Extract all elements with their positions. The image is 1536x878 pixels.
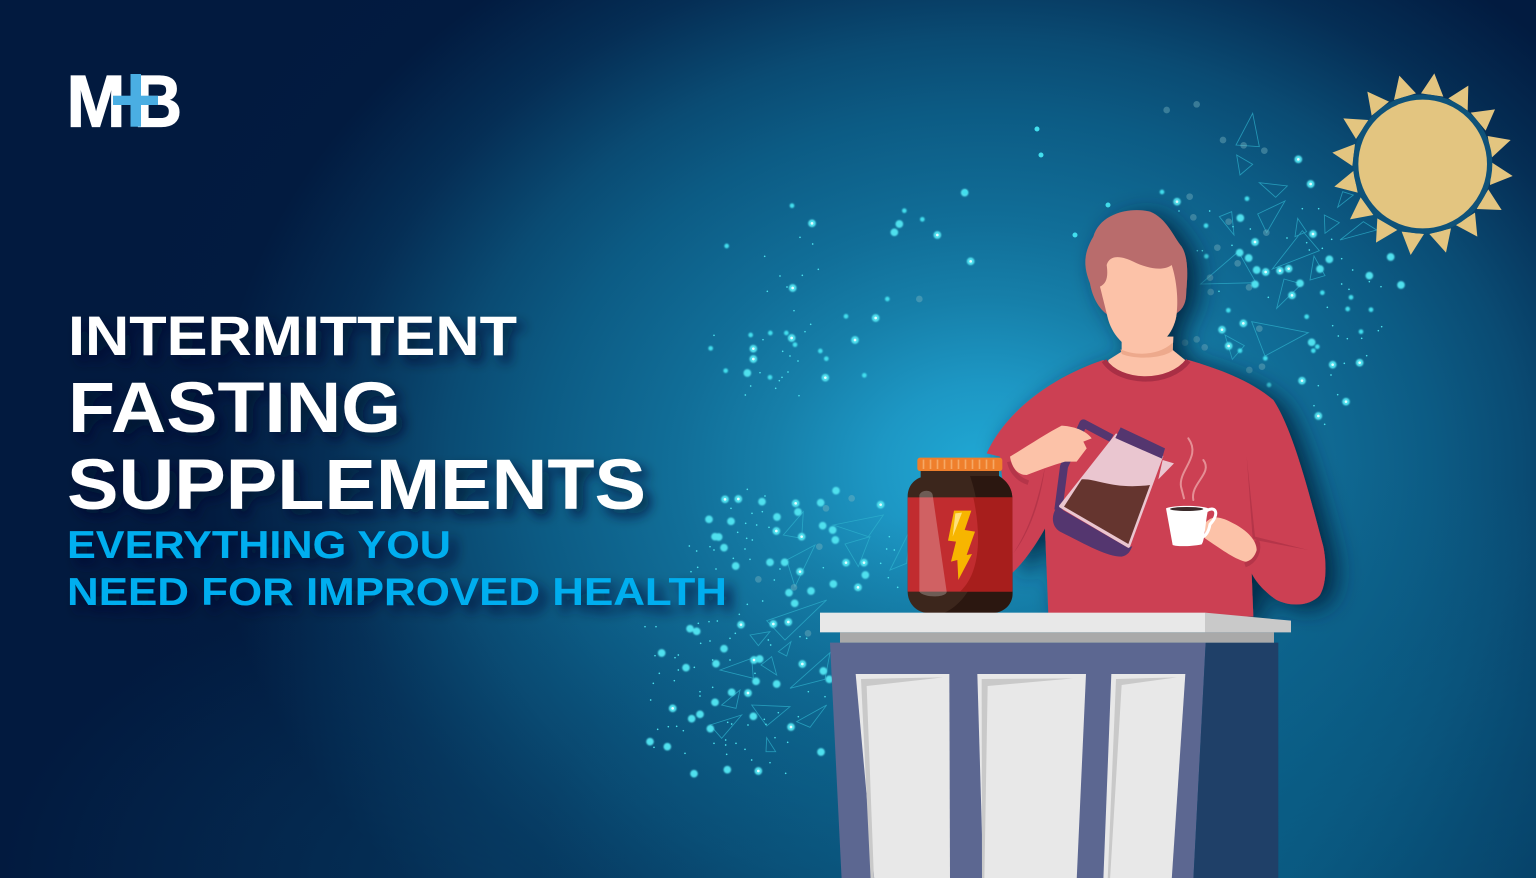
- panel left: [856, 674, 950, 878]
- counter side: [1193, 643, 1278, 878]
- panel right: [1103, 674, 1185, 878]
- jar cap: [917, 458, 1002, 471]
- coffee cup: [1166, 506, 1216, 546]
- subheading line 2: NEED FOR IMPROVED HEALTH: [67, 571, 727, 614]
- jar highlight: [919, 491, 947, 596]
- neck shadow: [1121, 343, 1173, 358]
- countertop: [820, 613, 1205, 632]
- neck: [1108, 337, 1185, 387]
- heading line: FASTING: FASTING: [68, 369, 401, 448]
- person pouring coffee: [908, 210, 1326, 617]
- hair: [1085, 210, 1187, 314]
- right hand: [1205, 518, 1258, 565]
- counter: [820, 613, 1291, 878]
- panel middle: [977, 674, 1086, 878]
- icon: sun: [1332, 73, 1513, 255]
- jar shade: [943, 476, 1012, 613]
- sweater folds: [1013, 457, 1308, 553]
- jar label: [908, 497, 1012, 592]
- heading line: INTERMITTENT: INTERMITTENT: [68, 304, 517, 367]
- title text block: [67, 304, 727, 614]
- subheading line 1: EVERYTHING YOU: [67, 524, 451, 567]
- particles: upper-middle cluster: [711, 193, 971, 396]
- heading line: SUPPLEMENTS: SUPPLEMENTS: [67, 446, 646, 525]
- sweater collar: [1104, 361, 1188, 379]
- supplement jar: [908, 458, 1013, 613]
- red sweater: [987, 360, 1326, 617]
- left hand: [1009, 426, 1092, 483]
- coffee kettle: [1053, 423, 1174, 557]
- figure silhouette with shadow: [987, 210, 1326, 617]
- particles: scattered top dots: [965, 129, 1108, 235]
- logo: M+B: [66, 62, 182, 143]
- face: [1100, 257, 1177, 351]
- countertop side: [1205, 613, 1291, 632]
- logo: M+B: B: [134, 62, 182, 143]
- jar body: [908, 471, 1013, 613]
- counter front: [830, 643, 1206, 878]
- lightning bolt: [948, 511, 975, 580]
- counter underside: [840, 632, 1274, 643]
- steam: [1181, 438, 1206, 500]
- particles: lower-left constellation: [645, 489, 910, 774]
- jar label shade: [960, 497, 1012, 592]
- particles: upper-right constellation: [1162, 104, 1401, 424]
- logo: M+B: M: [66, 62, 126, 143]
